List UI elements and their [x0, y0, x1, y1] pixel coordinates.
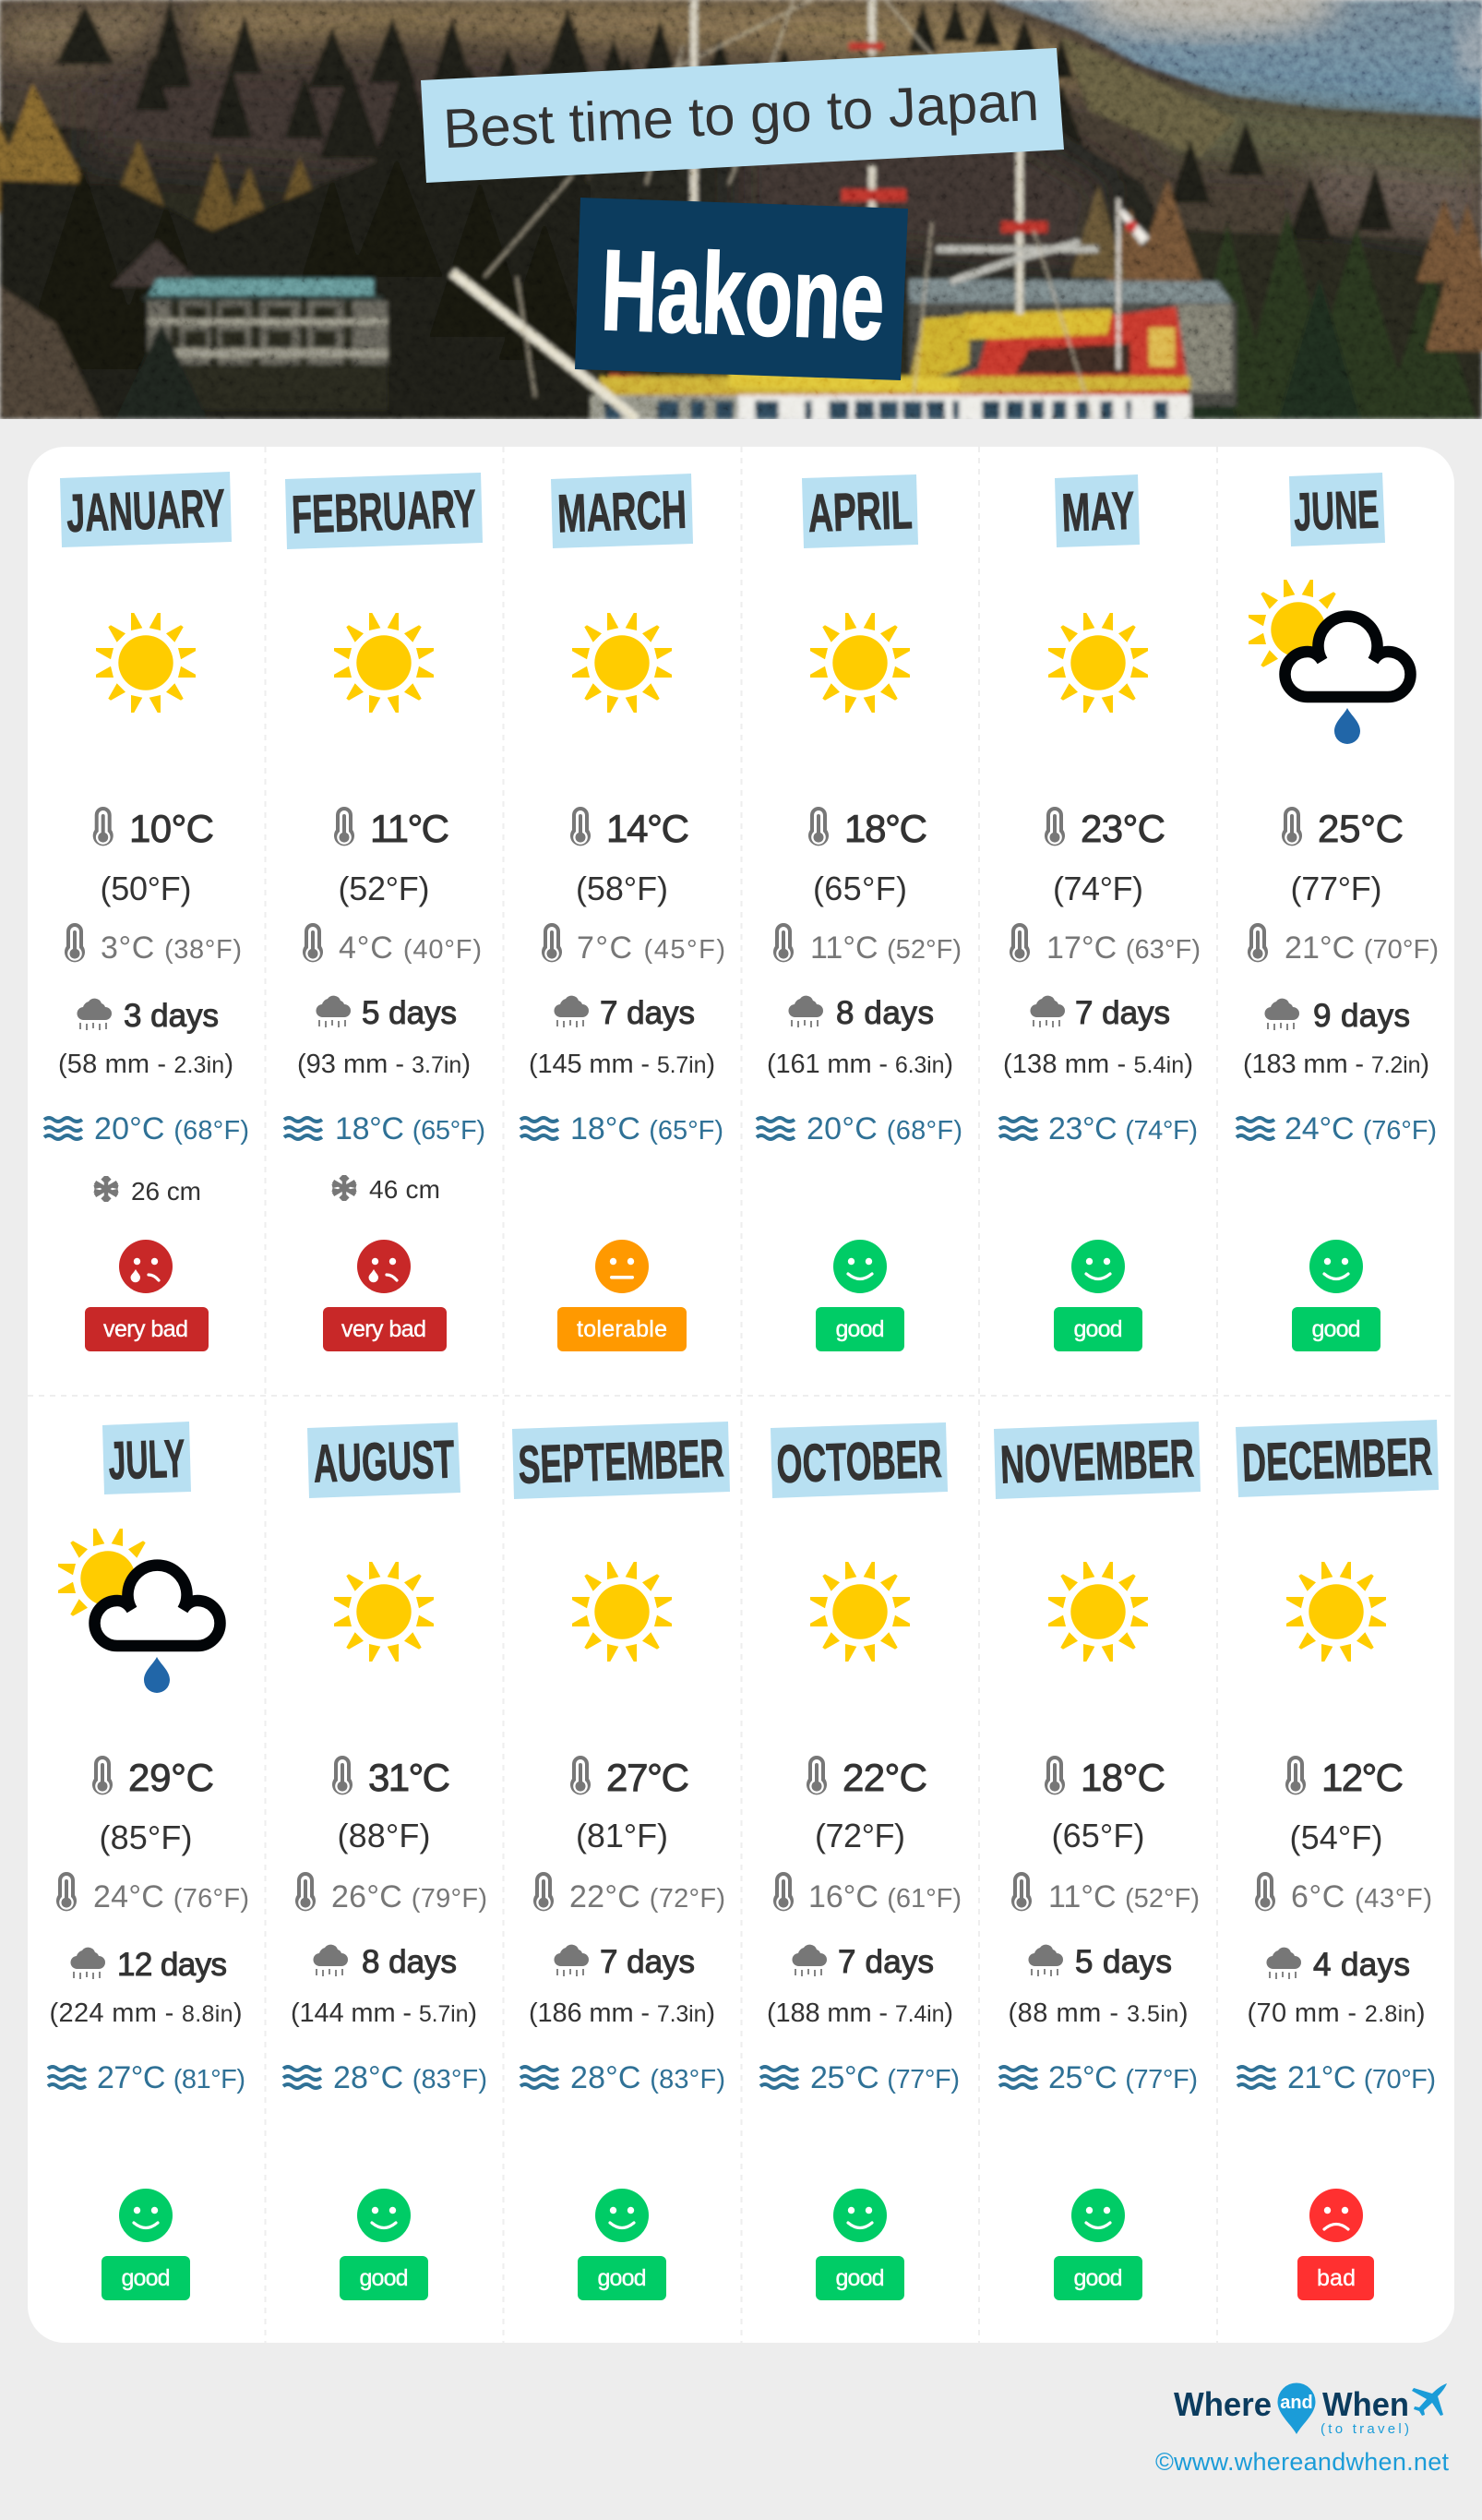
- high temperature: 12°C: [1321, 1756, 1404, 1799]
- icon: sun: [810, 1562, 910, 1662]
- high temperature: (65°F): [1052, 1817, 1144, 1854]
- logo: Where and When: (to travel): [1321, 2421, 1409, 2437]
- high temperature: (58°F): [576, 870, 668, 907]
- low temperature: 22°C (72°F): [569, 1879, 725, 1914]
- high temperature: 18°C: [1081, 1756, 1165, 1799]
- month label: [102, 1422, 191, 1494]
- icon: airplane: [1412, 2383, 1447, 2416]
- rainfall: 5 days: [362, 995, 457, 1031]
- sea temperature: 25°C (77°F): [1048, 2060, 1198, 2095]
- rainfall: 5 days: [1075, 1944, 1172, 1980]
- panel: January: [44, 472, 249, 1351]
- panel: September: [512, 1422, 730, 2300]
- icon: map pin: and: [1280, 2393, 1313, 2413]
- rating: good: good: [598, 2265, 646, 2291]
- title ribbon: Best time to go to Japan: Best time to go to Japan: [442, 70, 1040, 160]
- icon: sun: [334, 1562, 434, 1662]
- rating: good: [816, 1240, 904, 1351]
- high temperature: [570, 1756, 689, 1854]
- icon: map pin: [1277, 2383, 1316, 2434]
- high temperature: [92, 1756, 214, 1856]
- high temperature: [334, 807, 449, 907]
- sea temperature: 18°C (65°F): [570, 1111, 723, 1146]
- logo: Where and When: [1174, 2383, 1447, 2437]
- high temperature: (85°F): [100, 1818, 192, 1856]
- high temperature: (81°F): [576, 1817, 668, 1854]
- rainfall: 7 days: [1075, 995, 1170, 1031]
- month label: MARCH: [556, 480, 687, 544]
- rating: very bad: very bad: [341, 1316, 426, 1342]
- low temperature: 16°C (61°F): [808, 1879, 962, 1914]
- panel: August: [283, 1422, 487, 2300]
- sea temperature: 18°C (65°F): [335, 1111, 485, 1146]
- snow: [94, 1176, 201, 1206]
- photo grain: [0, 0, 1482, 419]
- sea temperature: 21°C (70°F): [1287, 2060, 1436, 2095]
- low temperature: 6°C (43°F): [1291, 1879, 1432, 1914]
- high temperature: [1285, 1756, 1404, 1856]
- sea temperature: 20°C (68°F): [94, 1111, 249, 1146]
- month label: OCTOBER: [775, 1429, 943, 1494]
- rainfall: 7 days: [600, 995, 695, 1031]
- month label: AUGUST: [312, 1429, 456, 1494]
- high temperature: (65°F): [813, 870, 907, 907]
- high temperature: [1045, 1756, 1165, 1854]
- title ribbon: Best time to go to Japan: [421, 48, 1064, 183]
- low temperature: 4°C (40°F): [339, 930, 482, 966]
- high temperature: (72°F): [815, 1817, 905, 1854]
- month label: [551, 474, 693, 548]
- rainfall: (183 mm - 7.2in): [1243, 1050, 1429, 1079]
- rainfall: 7 days: [838, 1944, 934, 1980]
- rating: tolerable: [557, 1240, 687, 1351]
- month label: [1289, 473, 1385, 546]
- rainfall: (88 mm - 3.5in): [1008, 1998, 1189, 2028]
- month label: APRIL: [807, 480, 914, 544]
- sea temperature: 28°C (83°F): [333, 2060, 487, 2095]
- rainfall: [1008, 1944, 1189, 2028]
- logo: Where and When: Where: [1174, 2385, 1272, 2423]
- high temperature: 22°C: [843, 1756, 927, 1799]
- high temperature: 23°C: [1081, 807, 1165, 850]
- icon: sun behind rain cloud: [1249, 580, 1410, 744]
- snow: [332, 1175, 440, 1204]
- rainfall: (224 mm - 8.8in): [50, 1998, 242, 2028]
- header photo: Hakone lake ship and forested hill: [0, 0, 1482, 434]
- month label: [802, 474, 918, 548]
- rating: good: [816, 2189, 904, 2300]
- low temperature: [56, 1872, 249, 1914]
- sea temperature: 27°C (81°F): [97, 2060, 245, 2095]
- icon: sun: [810, 613, 910, 713]
- low temperature: [542, 923, 725, 966]
- rainfall: [1243, 998, 1429, 1079]
- panel: October: [760, 1422, 962, 2300]
- high temperature: 11°C: [370, 807, 449, 850]
- rainfall: 3 days: [124, 998, 219, 1034]
- rainfall: 4 days: [1313, 1947, 1410, 1983]
- month label: SEPTEMBER: [517, 1428, 725, 1495]
- month label: JUNE: [1293, 479, 1380, 543]
- right building: [909, 279, 1232, 303]
- icon: sun behind rain cloud: [58, 1529, 220, 1693]
- panel: December: [1236, 1420, 1439, 2300]
- rating: bad: bad: [1317, 2265, 1356, 2291]
- panel: July: [48, 1422, 249, 2300]
- high temperature: 18°C: [844, 807, 927, 850]
- title ribbon: Hakone: Hakone: [599, 227, 887, 364]
- low temperature: [65, 923, 242, 966]
- panel: calendar card: [28, 447, 1454, 2343]
- high temperature: 31°C: [368, 1756, 450, 1799]
- panel: April: [757, 474, 962, 1351]
- low temperature: [295, 1872, 487, 1914]
- high temperature: 10°C: [129, 807, 214, 850]
- low temperature: 7°C (45°F): [577, 930, 725, 966]
- rainfall: (93 mm - 3.7in): [297, 1050, 471, 1079]
- rainfall: 8 days: [362, 1944, 457, 1980]
- month label: [307, 1422, 460, 1498]
- rating: good: good: [122, 2265, 170, 2291]
- month label: MAY: [1060, 481, 1136, 543]
- rating: very bad: very bad: [103, 1316, 188, 1342]
- high temperature: [570, 807, 689, 907]
- icon: sun: [572, 613, 672, 713]
- rainfall: (161 mm - 6.3in): [767, 1050, 953, 1079]
- high temperature: (50°F): [100, 870, 192, 907]
- icon: sun: [1286, 1562, 1386, 1662]
- rating: good: [578, 2189, 666, 2300]
- low temperature: [303, 923, 482, 966]
- high temperature: (74°F): [1053, 870, 1143, 907]
- ship: [605, 304, 1190, 398]
- rating: good: good: [836, 1316, 884, 1342]
- high temperature: [332, 1756, 450, 1854]
- rainfall: 8 days: [836, 995, 934, 1031]
- rating: very bad: [85, 1240, 209, 1351]
- panel: November: [994, 1422, 1201, 2300]
- rainfall: (70 mm - 2.8in): [1248, 1998, 1425, 2028]
- high temperature: 27°C: [606, 1756, 689, 1799]
- high temperature: (52°F): [338, 870, 430, 907]
- high temperature: [807, 1756, 927, 1854]
- high temperature: (77°F): [1290, 870, 1382, 907]
- rainfall: [529, 995, 715, 1079]
- low temperature: [1011, 1872, 1200, 1914]
- rainfall: [529, 1944, 715, 2028]
- month label: FEBRUARY: [291, 479, 477, 545]
- masts and rigging: [694, 0, 1020, 314]
- rating: good: good: [1074, 2265, 1122, 2291]
- low temperature: [1010, 923, 1201, 966]
- sea temperature: 25°C (77°F): [810, 2060, 960, 2095]
- rating: good: good: [836, 2265, 884, 2291]
- high temperature: 29°C: [128, 1756, 214, 1799]
- sea temperature: 24°C (76°F): [1285, 1111, 1437, 1146]
- icon: sun: [96, 613, 196, 713]
- panel: February: [284, 473, 485, 1351]
- rainfall: [1248, 1947, 1425, 2028]
- high temperature: [93, 807, 214, 907]
- left building: [148, 279, 374, 297]
- rainfall: [1003, 995, 1193, 1079]
- rating: good: [340, 2189, 428, 2300]
- icon: sun: [572, 1562, 672, 1662]
- low temperature: 3°C (38°F): [101, 930, 242, 966]
- month label: [60, 472, 232, 547]
- panel: March: [520, 474, 725, 1351]
- rainfall: (58 mm - 2.3in): [58, 1050, 233, 1079]
- low temperature: [1255, 1872, 1432, 1914]
- rainfall: [767, 1944, 953, 2028]
- low temperature: 17°C (63°F): [1046, 930, 1201, 966]
- month label: JANUARY: [66, 478, 226, 544]
- low temperature: 24°C (76°F): [93, 1879, 249, 1914]
- sea temperature: 28°C (83°F): [570, 2060, 725, 2095]
- rainfall: [291, 1944, 477, 2028]
- low temperature: [533, 1872, 725, 1914]
- high temperature: 25°C: [1318, 807, 1404, 850]
- rating: good: [1054, 2189, 1142, 2300]
- rating: good: good: [1312, 1316, 1360, 1342]
- sea temperature: 20°C (68°F): [807, 1111, 962, 1146]
- high temperature: (88°F): [338, 1817, 430, 1854]
- rainfall: (145 mm - 5.7in): [529, 1050, 715, 1079]
- rainfall: [58, 998, 233, 1079]
- rainfall: (138 mm - 5.4in): [1003, 1050, 1193, 1079]
- copyright URL: ©www.whereandwhen.net: [1155, 2448, 1449, 2476]
- month label: [512, 1422, 730, 1499]
- rainfall: [297, 995, 471, 1079]
- low temperature: 11°C (52°F): [810, 930, 962, 966]
- rating: good: [1292, 1240, 1380, 1351]
- rating: good: good: [1074, 1316, 1122, 1342]
- low temperature: 21°C (70°F): [1285, 930, 1439, 966]
- high temperature: 14°C: [606, 807, 689, 850]
- panel: June: [1237, 473, 1439, 1351]
- month label: [994, 1422, 1201, 1499]
- rating: bad: [1297, 2189, 1374, 2300]
- icon: sun: [1048, 613, 1148, 713]
- rainfall: [50, 1947, 242, 2028]
- rainfall: 7 days: [600, 1944, 695, 1980]
- month label: [771, 1422, 948, 1498]
- icon: sun: [334, 613, 434, 713]
- month label: JULY: [107, 1429, 186, 1491]
- high temperature: [808, 807, 927, 907]
- sea temperature: 23°C (74°F): [1048, 1111, 1198, 1146]
- rating: good: good: [360, 2265, 408, 2291]
- low temperature: 11°C (52°F): [1048, 1879, 1200, 1914]
- snow: 26 cm: [131, 1177, 201, 1206]
- rating: good: [1054, 1240, 1142, 1351]
- low temperature: [773, 923, 962, 966]
- snow: 46 cm: [369, 1175, 440, 1204]
- panel: May: [999, 474, 1201, 1351]
- rating: good: [102, 2189, 190, 2300]
- rainfall: 9 days: [1313, 998, 1410, 1034]
- icon: sun: [1048, 1562, 1148, 1662]
- month label: [285, 473, 483, 549]
- high temperature: [1282, 807, 1404, 907]
- high temperature: [1045, 807, 1165, 907]
- high temperature: (54°F): [1290, 1818, 1382, 1856]
- rainfall: (186 mm - 7.3in): [529, 1998, 715, 2028]
- rating: tolerable: tolerable: [577, 1316, 667, 1342]
- low temperature: [773, 1872, 962, 1914]
- low temperature: 26°C (79°F): [331, 1879, 487, 1914]
- month label: NOVEMBER: [999, 1428, 1195, 1495]
- title ribbon: Hakone: [575, 198, 908, 380]
- logo: Where and When: When: [1322, 2385, 1409, 2423]
- rainfall: 12 days: [117, 1947, 227, 1983]
- rating: very bad: [323, 1240, 447, 1351]
- month label: [1055, 474, 1140, 547]
- rainfall: (188 mm - 7.4in): [767, 1998, 953, 2028]
- low temperature: [1248, 923, 1439, 966]
- rainfall: (144 mm - 5.7in): [291, 1998, 477, 2028]
- rainfall: [767, 995, 953, 1079]
